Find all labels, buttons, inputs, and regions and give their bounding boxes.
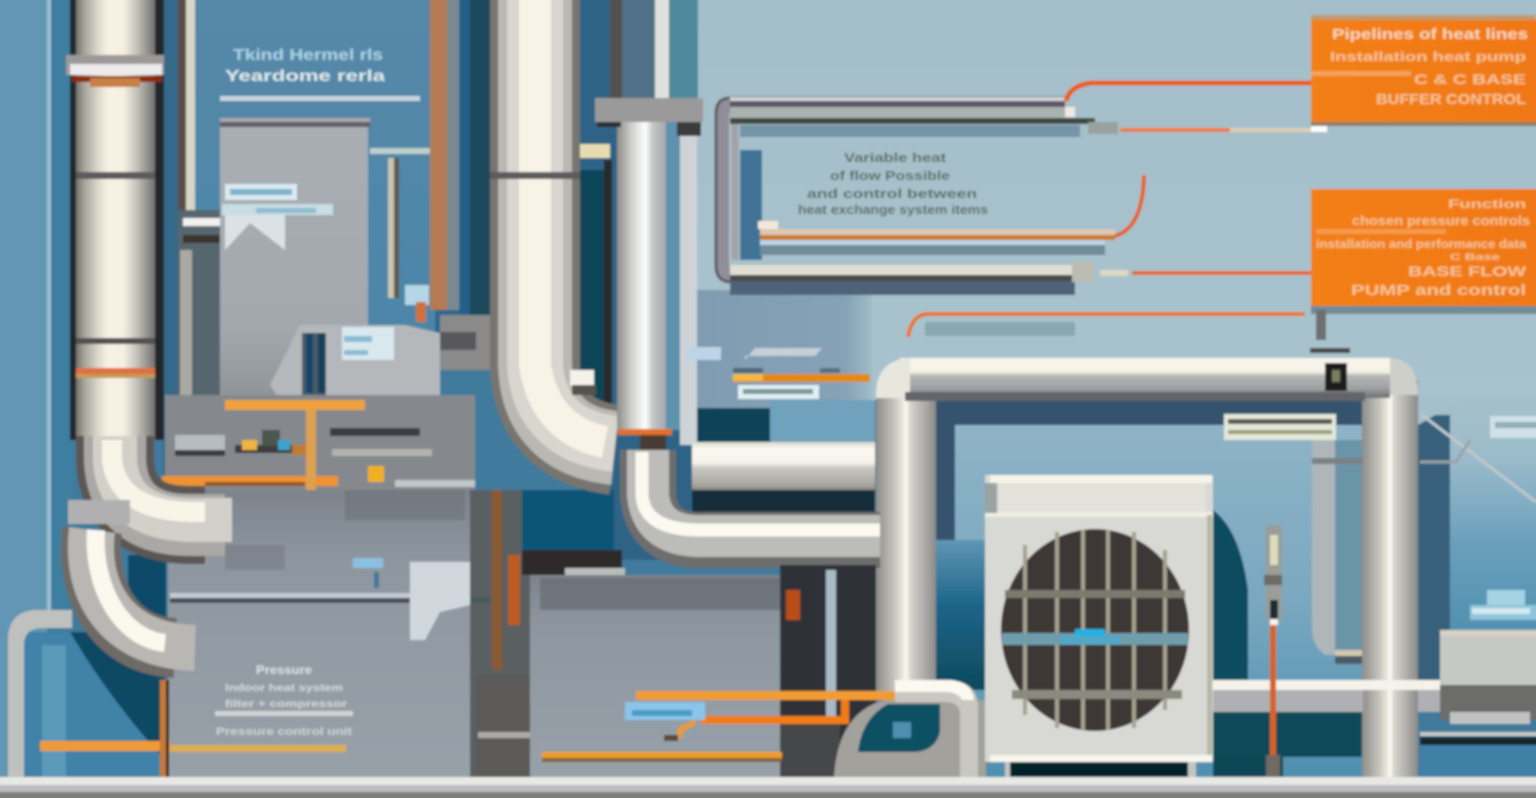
panel: blue gap below big pipe [522, 490, 625, 577]
text: bracket caption: and control between [807, 186, 977, 201]
callout: orange box lower: chosen pressure controls [1352, 213, 1530, 228]
vertical tubes behind panel [370, 0, 470, 340]
text: cabinet caption [215, 663, 353, 738]
text: bracket caption: of flow Possible [830, 168, 950, 183]
callout: orange box lower: installation and performance data [1316, 237, 1526, 251]
label: diagonal leader and tag at right edge [1420, 415, 1536, 620]
callout: orange box top: C & C BASE [1414, 71, 1526, 87]
callout: orange box lower: PUMP and control [1351, 282, 1526, 299]
callout: orange box lower [1311, 189, 1536, 314]
fan grille [1001, 529, 1189, 731]
label: small tag [342, 327, 394, 360]
label: white plate on pipe [1224, 414, 1336, 440]
callout: orange box top: Installation heat pump [1330, 49, 1526, 64]
title block: Yeardome rerla [225, 68, 385, 85]
callout: orange box lower: C Base [1450, 252, 1500, 262]
callout: orange box lower: BASE FLOW [1408, 263, 1527, 279]
duct: lower left blue recess [8, 555, 166, 777]
text: cabinet caption: Indoor heat system [225, 683, 343, 694]
pipe: thin vertical riser [178, 0, 224, 440]
pipe: middle horizontal ducts [640, 435, 880, 540]
pipe: right horizontal branch [1213, 680, 1445, 712]
text: cabinet caption: Pressure control unit [216, 726, 352, 738]
unit: outdoor condenser [985, 475, 1213, 777]
floor: base slab [0, 777, 1536, 798]
pipe: orange lines lower middle with tag [542, 691, 896, 762]
pipe: bracket loop on pale wall [716, 97, 1128, 295]
valve: small brass fitting [570, 144, 610, 395]
text: bracket caption [798, 150, 988, 217]
unit: right edge compressor [1420, 630, 1536, 778]
callout: orange box top: BUFFER CONTROL [1376, 91, 1526, 108]
text: bracket caption: heat exchange system items [798, 202, 988, 217]
text: bracket caption: Variable heat [844, 150, 947, 165]
pipe: third column with flange [595, 0, 703, 445]
valve: black actuator [1310, 310, 1350, 391]
pipe: secondary inner vertical [1312, 440, 1365, 664]
arrow: leader lines to callouts [908, 83, 1327, 337]
pipe: inner orange line [758, 175, 1144, 255]
pipe: orange conduit and tag [162, 410, 338, 517]
label: cabinet tag [222, 184, 333, 215]
panel: mid machinery band [165, 395, 475, 495]
panel: upper grey cabinet [220, 118, 370, 455]
panel: lower middle grey cabinet [530, 575, 780, 777]
column: right dark shaft [780, 565, 876, 777]
pipe: lower left orange line [40, 680, 346, 777]
callout: orange box lower: Function [1448, 197, 1526, 211]
title block: Tkind Hermel rls [233, 47, 383, 64]
pipe: lower left double elbow [68, 436, 250, 648]
callout: orange box top: Pipelines of heat lines [1332, 26, 1528, 43]
text: cabinet caption: Pressure [256, 663, 312, 677]
title block [220, 47, 420, 101]
pipe: large loop around unit [876, 310, 1418, 780]
callout: orange box top [1311, 15, 1536, 126]
pipe: bottom left elbow of loop [834, 680, 986, 777]
column: dark shaft [470, 490, 542, 777]
gauge: vertical probe with orange line [1264, 525, 1282, 777]
panel: blue window inside pipe loop [935, 395, 1368, 780]
pipe: second big column with elbow [490, 0, 615, 450]
panel: lower left grey cabinet [168, 490, 470, 777]
labels: blue mid panel tags and orange bar [686, 347, 870, 399]
text: cabinet caption: filter + compressor [225, 699, 347, 710]
pipe: left vertical column [66, 0, 164, 440]
flange: top ring [66, 55, 164, 378]
unit: central valve cluster [270, 315, 525, 403]
